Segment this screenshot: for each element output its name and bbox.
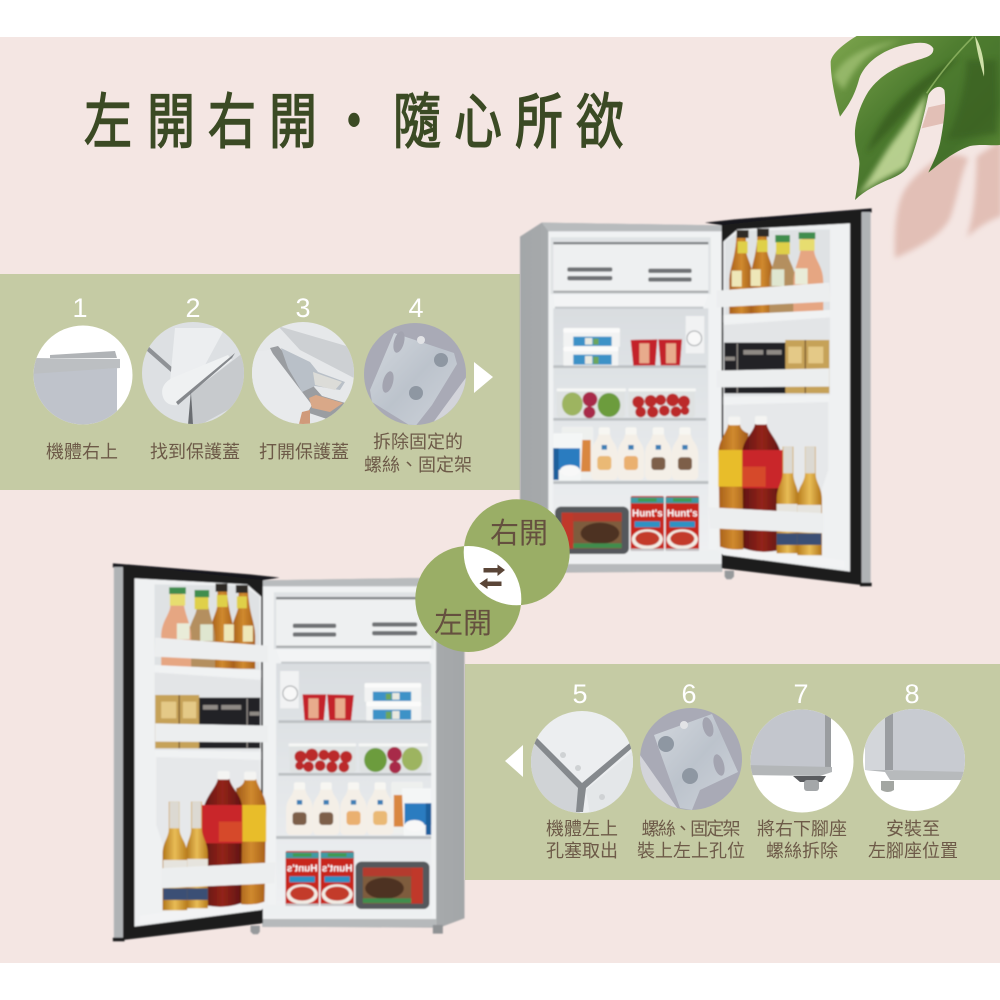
fridge: door hinged on right bbox=[520, 208, 872, 586]
steps 5-8 bbox=[505, 679, 968, 861]
circle: left open bbox=[415, 546, 521, 652]
step 6 bbox=[638, 684, 744, 859]
caption 4 line 2: 螺絲、固定架 bbox=[364, 455, 472, 475]
caption 5: 機體左上 bbox=[546, 819, 618, 839]
door bbox=[705, 208, 872, 225]
icon: swap arrows bbox=[480, 564, 505, 589]
door bins bbox=[717, 283, 830, 307]
photo: bracket mounted bbox=[640, 708, 742, 810]
step number 8: 8 bbox=[904, 679, 920, 709]
door bottles bottom bbox=[718, 424, 748, 550]
control dial bbox=[686, 316, 704, 353]
door cans bbox=[724, 343, 786, 393]
meal tray bbox=[555, 507, 629, 554]
photo: bracket and screws bbox=[364, 323, 466, 425]
caption 4: 拆除固定的 bbox=[373, 432, 463, 452]
band: steps 1-4 bbox=[0, 274, 520, 490]
caption 5 line 2: 孔塞取出 bbox=[546, 841, 618, 861]
door liner bbox=[717, 223, 850, 572]
body bbox=[520, 223, 722, 573]
caption 2: 找到保護蓋 bbox=[150, 442, 240, 462]
step 5 bbox=[531, 684, 633, 858]
fridge: door hinged on left bbox=[113, 563, 465, 941]
door bottles top bbox=[729, 229, 774, 314]
fruit boxes bbox=[557, 389, 625, 418]
step number 2: 2 bbox=[185, 293, 201, 323]
caption 1: 機體右上 bbox=[46, 442, 118, 462]
photo: right foot bbox=[745, 705, 854, 812]
circle: right open bbox=[464, 499, 570, 605]
caption 8 line 2: 左腳座位置 bbox=[868, 841, 958, 861]
yogurt cups bbox=[631, 339, 657, 366]
badge: left and right opening bbox=[415, 499, 570, 652]
shelves bbox=[553, 365, 706, 368]
interior wall bbox=[553, 308, 708, 552]
caption 8: 安裝至 bbox=[886, 819, 940, 839]
cans bbox=[631, 496, 664, 551]
overlap lens bbox=[464, 546, 522, 606]
step 2 bbox=[142, 298, 244, 460]
step number 4: 4 bbox=[408, 293, 424, 323]
photo: find hinge cover bbox=[142, 322, 244, 424]
photo: top right corner bbox=[30, 326, 132, 430]
title: 左開右開・隨心所欲 bbox=[84, 89, 624, 156]
steps 1-4 bbox=[30, 293, 493, 475]
step number 6: 6 bbox=[681, 679, 697, 709]
freezer bbox=[553, 243, 708, 292]
photo: open hinge cover bbox=[252, 322, 354, 424]
label: 左開: 左開 bbox=[434, 607, 492, 640]
step number 3: 3 bbox=[295, 293, 311, 323]
caption 6 line 2: 裝上左上孔位 bbox=[637, 841, 745, 861]
step number 5: 5 bbox=[572, 679, 588, 709]
caption 3: 打開保護蓋 bbox=[259, 442, 349, 462]
arrow: right bbox=[474, 362, 493, 393]
step 1 bbox=[30, 293, 132, 462]
step number 7: 7 bbox=[793, 679, 809, 709]
step number 1: 1 bbox=[72, 293, 88, 323]
step 4 bbox=[360, 293, 472, 475]
yogurt tub bbox=[562, 427, 593, 479]
step 3 bbox=[252, 298, 354, 460]
leaf shadow bbox=[895, 140, 1000, 258]
caption 7 line 2: 螺絲拆除 bbox=[766, 841, 838, 861]
leaf blade bbox=[831, 36, 1000, 200]
leaf upper shadow bbox=[897, 57, 947, 128]
caption 7: 將右下腳座 bbox=[757, 819, 847, 839]
arrow: left bbox=[505, 745, 523, 777]
caption 6: 螺絲、固定架 bbox=[642, 819, 740, 839]
step 8 bbox=[863, 679, 968, 861]
leaf bbox=[831, 36, 1000, 200]
photo: left foot bbox=[863, 705, 968, 811]
photo: top left plug bbox=[531, 711, 633, 813]
label: 右開: 右開 bbox=[490, 517, 548, 550]
butter boxes bbox=[563, 328, 620, 347]
milk bottles bbox=[591, 427, 618, 480]
step 7 bbox=[745, 679, 854, 861]
leaf shading and veins bbox=[833, 36, 997, 197]
band: steps 5-8 bbox=[465, 664, 1000, 880]
